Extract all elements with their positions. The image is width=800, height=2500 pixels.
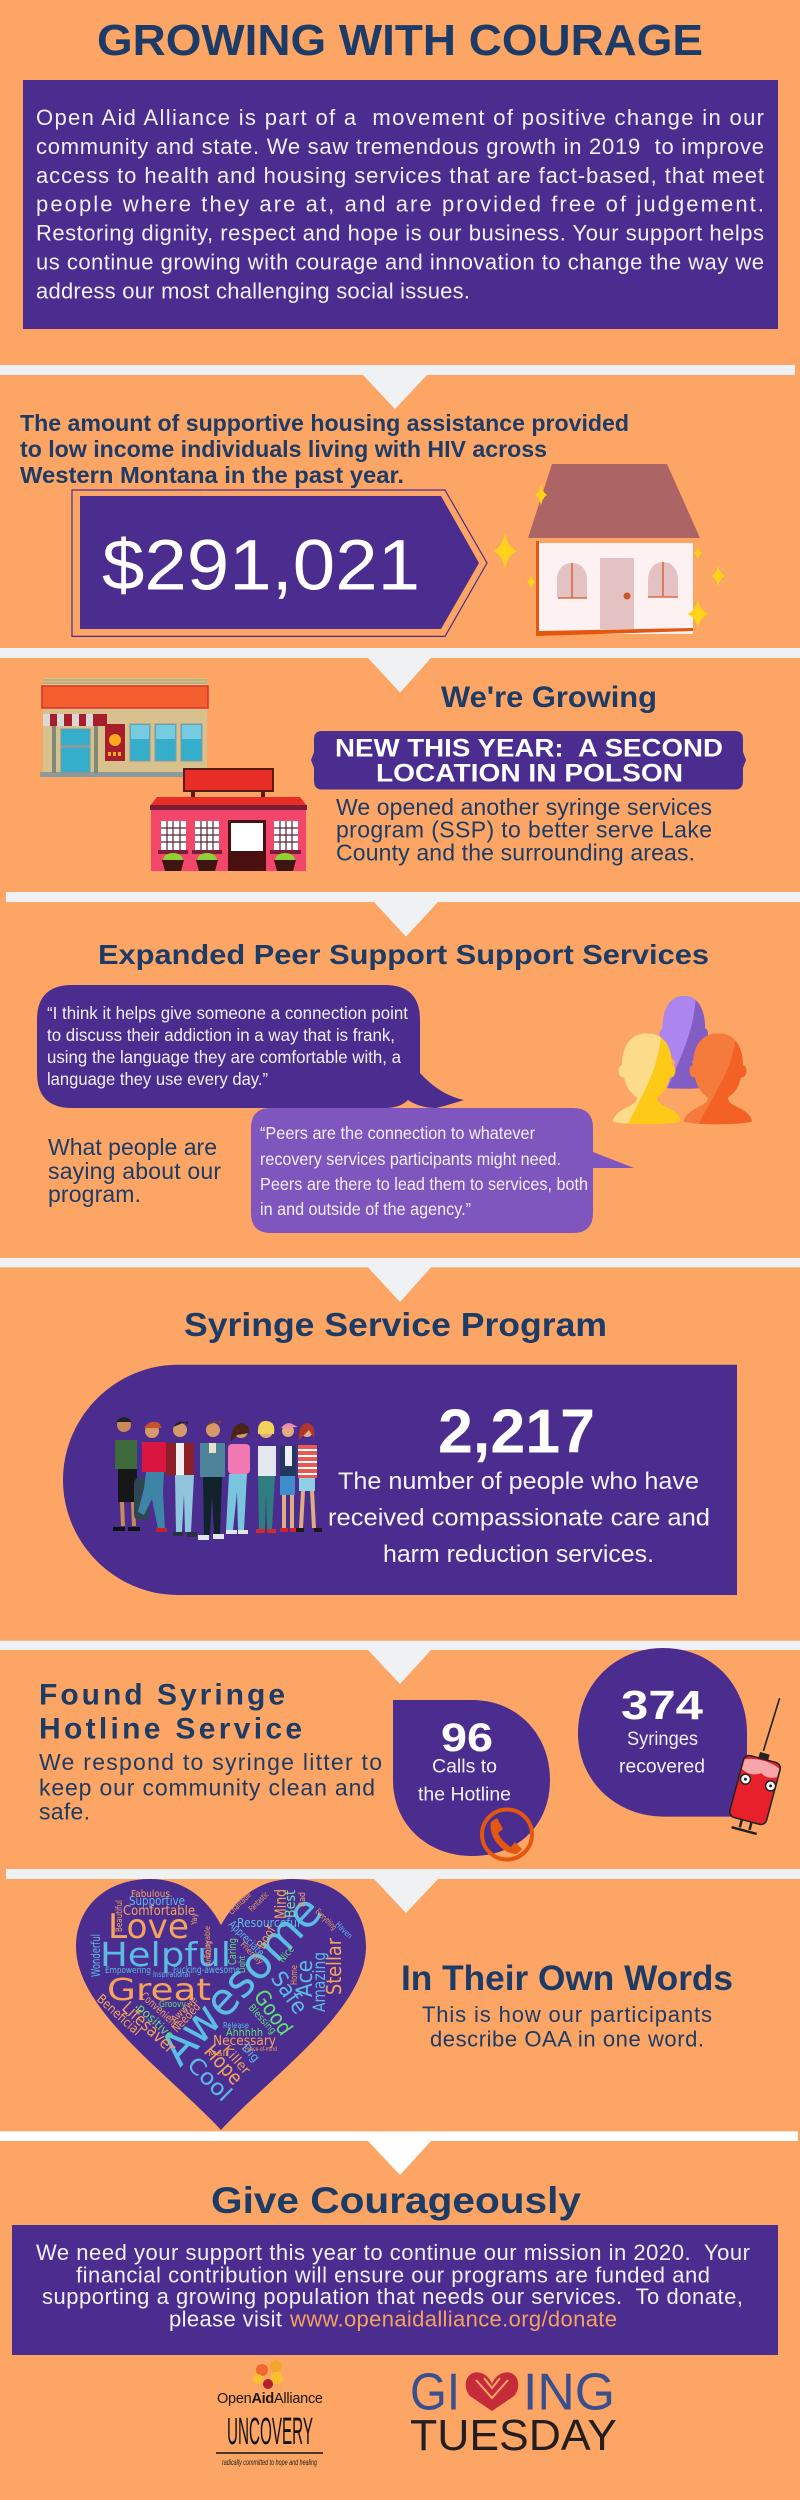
speech bubble: quote 1: using the language they are comfortable with, a [47,1047,401,1067]
heart word cloud: Fantastic [247,1890,270,1913]
heart word cloud: Resourceful [237,1916,300,1930]
bubble: hotline calls [393,1700,550,1860]
speech bubble: quote 1: language they use every day.” [47,1069,268,1089]
intro text: community and state. We saw tremendous growth in 2019 to improve [36,134,764,159]
divider arrow 6 [6,1869,800,1913]
heart word cloud: Good [249,1985,297,2040]
icon: phone [482,1810,532,1860]
speech bubble: quote 2: in and outside of the agency.” [260,1199,471,1219]
heart word cloud: Light [238,1956,248,1973]
heart word cloud: Great [107,1973,211,2008]
statistic description [328,1468,710,1568]
logo: Open Aid Alliance / Uncovery: OpenAidAlliance [217,2391,323,2407]
heart word cloud: Inspirational [153,1970,190,1979]
heading: hotline [39,1679,302,1746]
intro text: Restoring dignity, respect and hope is our business. Your support helps [36,220,764,246]
heart word cloud: Helpful [100,1935,231,1974]
divider arrow 2 [0,648,800,693]
heading: peer support: Expanded Peer Support Support Services [98,939,709,970]
panel: donate: supporting a growing population that needs our services. To donate, [42,2284,743,2309]
icon: orange storefront [40,678,210,777]
icon: cartoon syringe [726,1693,800,1841]
bubble: hotline calls: 96 [441,1716,493,1760]
heading: hotline: Found Syringe [39,1679,285,1712]
arrow badge: housing amount: $291,021 [102,526,420,606]
heart word cloud: Best [283,1890,299,1918]
bubble: syringes recovered: recovered [619,1757,705,1778]
heart word cloud: Groovy [159,2000,187,2010]
heart word cloud: Wonderful [89,1934,103,1977]
heart word cloud: Enjoyable [203,1926,212,1958]
divider arrow 1 [0,365,795,409]
divider arrow 5 [0,1641,800,1684]
heading: we're growing: We're Growing [441,681,657,714]
heading: hotline: Hotline Service [39,1713,302,1746]
text: new location: County and the surrounding areas. [336,840,695,866]
heart word cloud: Beneficial [93,1992,143,2039]
heart word cloud: Haven [334,1920,354,1941]
icon: three heads [613,996,752,1125]
intro text: Open Aid Alliance is part of a movement of positive change in our [36,105,764,130]
heart word cloud: Fabulous [131,1889,170,1900]
text: new location: program (SSP) to better serve Lake [336,817,712,843]
panel: donate: please visit [169,2306,282,2332]
logo: Open Aid Alliance / Uncovery [216,2360,323,2467]
heart word cloud [76,1879,366,2130]
heading: give courageously: Give Courageously [211,2180,581,2221]
text: new location: We opened another syringe services [336,794,712,820]
heart word cloud: Comfortable [123,1904,195,1919]
title: GROWING WITH COURAGE [97,16,703,65]
heading: housing assistance: The amount of supportive housing assistance provided [20,410,629,436]
heart word cloud: Safe [265,1967,312,2019]
heart word cloud: Amazing [204,1941,213,1965]
logo: Giving Tuesday: ING [523,2363,615,2421]
text: new location [336,794,712,866]
logo: Giving Tuesday: TUESDAY [410,2411,617,2460]
bubble: syringes recovered: 374 [621,1682,703,1728]
text: word cloud caption: This is how our participants [422,2002,712,2027]
banner: new this year [311,731,746,790]
heading: in their own words: In Their Own Words [401,1959,733,1998]
heart word cloud: Convenient [138,1990,181,2030]
heart word cloud: Peace-of-mind [245,2046,277,2053]
text: hotline description: safe. [39,1798,90,1824]
text: what people are saying [48,1134,221,1207]
heart word cloud: Awesome [149,1884,333,2076]
statistic description: received compassionate care and [328,1505,710,1532]
heart word cloud: Amazing [310,1952,330,2012]
heart word cloud: Love [108,1907,189,1947]
heart word cloud: Empowering [105,1966,151,1976]
speech bubble: quote 1: to discuss their addiction in a way that is frank, [47,1025,395,1045]
text: UNCOVERY [227,2411,313,2453]
panel: donate [12,2225,778,2355]
statistic description: The number of people who have [338,1468,699,1495]
text: word cloud caption [422,2002,712,2052]
heart word cloud: Friendly [239,1940,265,1966]
bubble: hotline calls: Calls to [432,1757,497,1778]
speech bubble: quote 1 [37,985,464,1108]
speech bubble: quote 2: “Peers are the connection to whatever [260,1123,535,1143]
heart word cloud: Everything [314,1907,338,1932]
heart word cloud: Lifesaver [118,1998,180,2058]
bubble: syringes recovered [578,1648,747,1817]
intro text: access to health and housing services that are fact-based, that meet [36,163,764,188]
heart word cloud: Dig [239,2041,263,2065]
statistic: 2,217 [438,1398,595,1466]
arrow badge: housing amount [72,490,487,636]
heart word cloud: Rad [298,1892,308,1907]
logo: Open Aid Alliance / Uncovery: radically committed to hope and healing [222,2458,317,2467]
panel: donate: We need your support this year to continue our mission in 2020. Your [36,2240,750,2265]
heading: housing assistance [20,410,629,488]
heart word cloud: Beautiful [115,1900,125,1932]
heart word cloud: Killer [219,2043,253,2078]
heart word cloud: Awwwe [169,1995,200,2025]
divider arrow 7 [0,2131,798,2175]
speech bubble: quote 2: recovery services participants might need. [260,1149,561,1169]
icon: house with sparkles [493,464,725,636]
illustration: group of people [113,1417,322,1540]
heart word cloud: Ace [293,1960,318,1997]
intro text: us continue growing with courage and innovation to change the way we [36,250,764,274]
text: hotline description: keep our community clean and [39,1775,375,1801]
heart word cloud: Necessary [213,2034,276,2049]
heart word cloud: Release [223,2021,249,2030]
heading: syringe service program: Syringe Service Program [184,1306,607,1343]
text: hotline description: We respond to syringe litter to [39,1749,382,1775]
panel: donate: financial contribution will ensure our programs are funded and [76,2262,710,2287]
divider arrow 3 [6,892,800,937]
heart word cloud: Blessing [246,2003,278,2037]
bubble: syringes recovered: Syringes [627,1729,698,1750]
speech bubble: quote 2: Peers are there to lead them to services, both [260,1174,588,1194]
heart word cloud: Fucking-awesome [173,1965,240,1976]
logo: Giving Tuesday [410,2363,617,2460]
heart word cloud: Supportive [129,1894,185,1908]
text: what people are saying: What people are [48,1134,217,1160]
intro text: address our most challenging social issues. [36,278,470,304]
icon: pink storefront [150,769,307,871]
divider arrow 4 [0,1258,800,1302]
text: what people are saying: program. [48,1181,141,1207]
heart word cloud: Charitable [227,1890,253,1916]
donate link: www.openaidalliance.org/donate [289,2306,617,2332]
logo: Giving Tuesday: GI [410,2363,460,2421]
heart word cloud: Caring [226,1938,239,1965]
speech bubble: quote 1: “I think it helps give someone a connection point [47,1003,408,1023]
heart word cloud: Needed [169,2000,203,2035]
intro text: people where they are at, and are provided free of judgement. [36,192,764,216]
speech bubble: quote 2 [251,1108,634,1233]
heart word cloud: Ahhhhh [226,2026,263,2039]
bubble: hotline calls: the Hotline [418,1784,511,1805]
intro text [36,105,764,304]
text: hotline description [39,1749,382,1824]
panel: introduction [23,80,778,329]
heart word cloud: Hope [199,2039,248,2090]
heart word cloud: Mind [271,1889,290,1919]
heart word cloud: Nice [277,1944,297,1965]
heading: housing assistance: Western Montana in the past year. [20,462,404,488]
heart word cloud: Stellar [322,1937,346,1995]
banner: new this year: LOCATION IN POLSON [376,760,683,788]
heart word cloud: Yay [190,1913,199,1926]
text: word cloud caption: describe OAA in one word. [430,2026,704,2052]
statistic description: harm reduction services. [383,1541,654,1568]
heart word cloud: Appreciate [226,1918,267,1959]
text: what people are saying: saying about our [48,1158,221,1184]
heart word cloud: Mail [208,2050,228,2058]
panel: syringe service program [63,1365,737,1595]
heart word cloud: Home [290,1965,300,1985]
heart word cloud: positive [134,2001,177,2043]
heading: housing assistance: to low income individuals living with HIV across [20,436,547,462]
banner: new this year: NEW THIS YEAR: A SECOND [335,735,723,763]
heart word cloud: Boof [254,1923,280,1952]
heart word cloud: Cool [182,2053,236,2107]
